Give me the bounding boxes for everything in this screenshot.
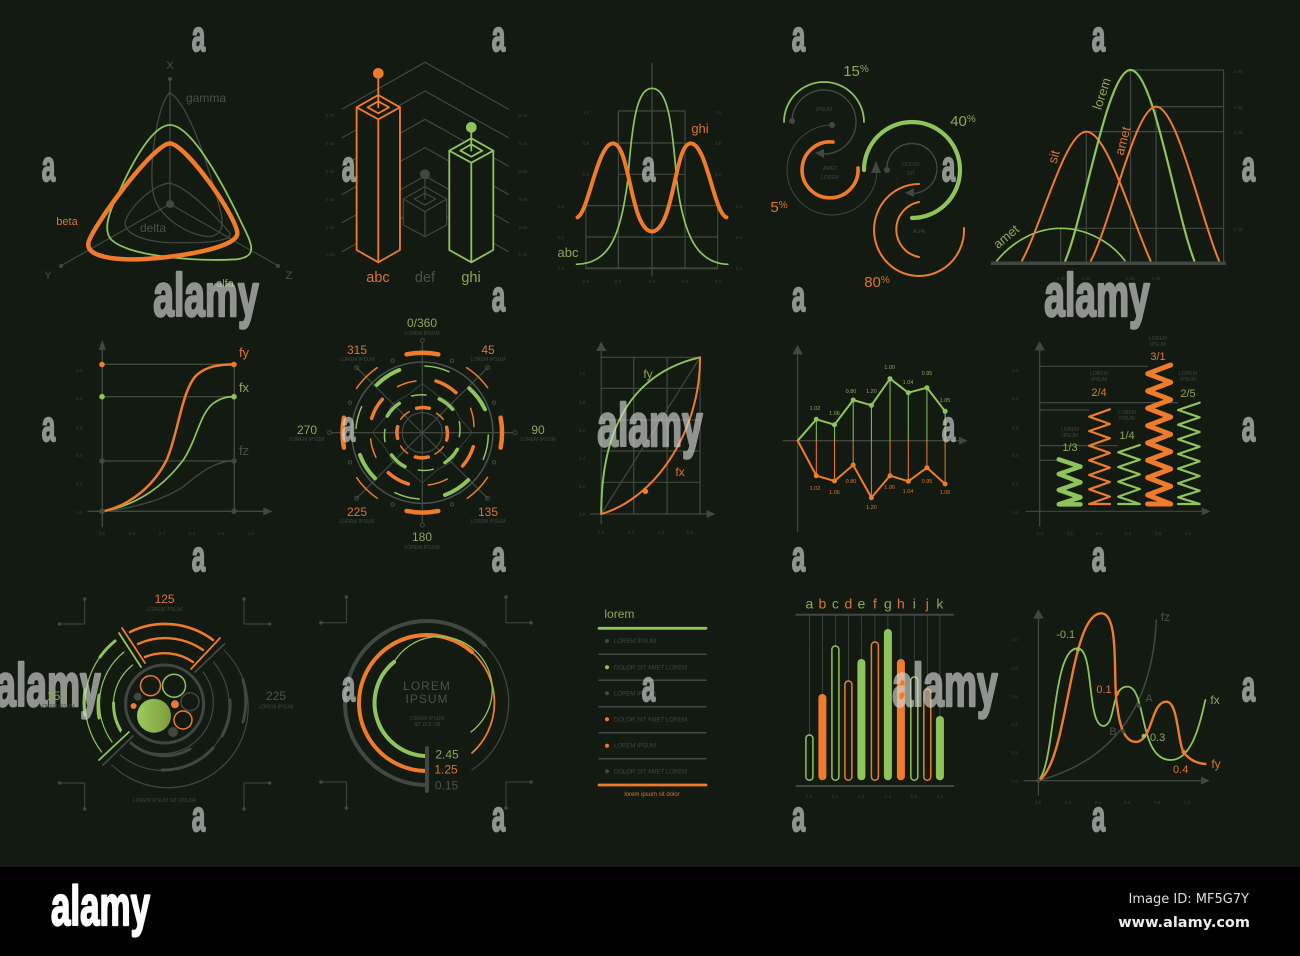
chart: overlapping peaks: 0.35 [1057,276,1066,281]
chart: oscillating curves: 1.0 [1011,637,1018,642]
watermark wordmarks: alamy [153,262,259,329]
chart: bell curves: 1.0 [583,110,590,115]
chart: concentric gauge: 2.45 [435,748,459,762]
chart: radar triangle [44,60,293,290]
chart: mirrored line plots: 1.20 [866,389,877,395]
chart: bell curves: 0.0 [736,266,743,271]
chart: polar dial: LOREM IPSUM [339,519,375,525]
chart: oscillating curves: fy [1211,757,1221,771]
chart: polar dial: 180 [412,530,432,544]
chart: zigzag spring bars: LOREM [1061,427,1079,433]
chart: overlapping peaks: sit [1045,148,1063,165]
chart: bell curves: 0.6 [715,172,722,177]
footer band: Image ID: MF5G7Y [1129,892,1249,907]
chart: circular sectors with bubbles: LOREM IPSUM [258,704,294,710]
panel: list: LOREM IPSUM [614,639,656,645]
panel: list: lorem [604,607,634,621]
chart: oscillating curves: 0.6 [1124,800,1131,805]
chart: overlapping peaks: 0.25 [1234,227,1243,232]
chart: zigzag spring bars: IPSUM [1150,342,1166,348]
watermark wordmarks: alamy [892,652,998,719]
chart: oscillating curves: 0.3 [1150,732,1165,744]
chart: circular sectors with bubbles: LOREM IPSUM [147,607,182,613]
chart: oscillating curves: 0.1 [1096,684,1112,696]
watermark glyphs: a [642,142,656,191]
chart: mirrored line plots: 1.05 [940,398,950,404]
chart: oscillating curves: 0.0 [1011,779,1018,784]
chart: isometric bars: 0.60 [326,169,335,174]
panel: list: LOREM IPSUM [614,744,656,750]
chart: isometric bars: 0.80 [326,197,335,202]
chart: zigzag spring bars: LOREM [1149,336,1167,342]
chart: leaf curves fy fx: 0.2 [628,530,635,535]
footer band: www.alamy.com [1118,915,1250,931]
chart: radar triangle: Z [286,270,293,282]
chart: isometric bars: def [415,270,436,286]
chart: polar dial: LOREM IPSUM [339,357,375,363]
chart: spiral percent arcs: LOREM [821,175,839,181]
chart: concentric gauge: LOREM [403,679,451,693]
chart: mirrored line plots: 0.80 [846,479,856,485]
chart: oscillating curves: 0.2 [1065,800,1072,805]
chart: overlapping peaks: 0.85 [1152,276,1161,281]
chart: zigzag spring bars: 0.4 [1096,531,1103,536]
chart: oscillating curves: 0.2 [1011,750,1018,755]
chart: mirrored line plots: 1.06 [829,411,840,417]
chart: mirrored line plots [783,345,968,532]
watermark glyphs: a [792,12,806,61]
chart: isometric bars: 0.20 [326,113,335,118]
watermark glyphs: a [342,402,356,451]
watermark glyphs: a [342,142,356,191]
chart: radar triangle: alfa [216,278,235,290]
chart: zigzag spring bars: LOREM [1179,371,1197,377]
chart: concentric gauge: SIT DOLOR [414,722,441,728]
chart: overlapping peaks: 0.85 [1234,105,1243,110]
footer band: alamy [51,874,150,937]
chart: radar triangle: beta [56,216,79,228]
chart: mirrored line plots: 1.02 [810,406,820,412]
chart: mirrored line plots: 1.02 [810,486,820,492]
chart: oscillating curves [1011,609,1221,805]
chart: bell curves: 0.8 [715,141,722,146]
chart: leaf curves fy fx: 1.0 [579,371,586,376]
label: 155 over watermark: 155 [47,689,67,703]
chart: leaf curves fy fx: 0.0 [598,530,605,535]
chart: isometric bars: 0.20 [519,113,528,118]
chart: zigzag spring bars: IPSUM [1062,433,1078,439]
chart: mirrored line plots: 1.04 [903,489,913,495]
chart: oscillating curves: fz [1161,610,1170,624]
chart: concentric gauge: 1.25 [434,762,458,776]
chart: cumulative curves fy fx fz: fx [239,380,250,395]
chart: zigzag spring bars: 0.0 [1012,510,1019,515]
chart: overlapping peaks: lorem [1090,76,1114,111]
watermark glyphs: a [942,142,956,191]
chart: isometric bars: 0.80 [519,197,528,202]
chart: spiral percent arcs: ALFA [913,229,926,235]
chart: spiral percent arcs: % [860,64,869,75]
chart: lettered bars: 0.4 [858,794,865,799]
chart: mirrored line plots: 1.04 [903,380,913,386]
chart: leaf curves fy fx [579,342,715,535]
chart: leaf curves fy fx: 0.8 [579,400,586,405]
watermark glyphs: a [42,402,56,451]
chart: bell curves: 0.6 [715,279,722,284]
chart: lettered bars: b [819,596,827,612]
chart: polar dial: 270 [297,423,317,437]
panel: list: LOREM IPSUM [614,691,656,697]
watermark glyphs: a [342,662,356,711]
chart: isometric bars: ghi [461,270,481,286]
chart: bell curves: 0.8 [583,141,590,146]
chart: overlapping peaks: 0.45 [1082,276,1091,281]
chart: mirrored line plots: 0.95 [922,479,932,485]
chart: lettered bars: 0.2 [832,794,839,799]
chart: leaf curves fy fx: 0.6 [579,428,586,433]
chart: zigzag spring bars: LOREM [1090,371,1108,377]
chart: polar dial: 45 [481,343,495,357]
watermark glyphs: a [792,792,806,841]
chart: lettered bars [796,596,953,799]
chart: lettered bars: c [832,596,839,612]
chart: spiral percent arcs: 15 [843,63,860,80]
chart: circular sectors with bubbles: 125 [155,592,175,606]
chart: bell curves [558,63,743,284]
chart: circular sectors with bubbles: LOREM IPSUM SIT DOLOR [133,798,197,804]
chart: cumulative curves fy fx fz: 0.6 [76,425,83,430]
chart: lettered bars: d [845,596,852,612]
chart: zigzag spring bars: 1.0 [1185,531,1192,536]
chart: cumulative curves fy fx fz: 0.4 [76,453,83,458]
chart: isometric bars: 0.40 [519,141,528,146]
chart: zigzag spring bars: 0.6 [1125,531,1132,536]
chart: overlapping peaks: amet [990,221,1022,252]
chart: lettered bars: k [936,596,944,612]
chart: zigzag spring bars [1012,336,1211,536]
chart: lettered bars: e [858,596,866,612]
chart: spiral percent arcs [770,63,976,291]
chart: bell curves: 0.6 [583,279,590,284]
watermark glyphs: a [192,12,206,61]
chart: lettered bars: 0.0 [806,794,813,799]
chart: radar triangle: Y [44,270,52,282]
chart: cumulative curves fy fx fz: 1.0 [76,368,83,373]
watermark glyphs: a [792,532,806,581]
chart: zigzag spring bars: 0.0 [1037,531,1044,536]
chart: isometric bars: 0.40 [326,141,335,146]
chart: lettered bars: 1.0 [937,794,944,799]
chart: polar dial: LOREM IPSUM [470,357,506,363]
chart: cumulative curves fy fx fz: 1.0 [248,531,255,536]
chart: bell curves: abc [558,245,579,260]
chart: cumulative curves fy fx fz: fz [239,443,249,458]
chart: zigzag spring bars: 2/4 [1091,387,1107,399]
chart: isometric bars: 0.60 [519,169,528,174]
chart: polar dial: LOREM IPSUM [289,437,325,443]
chart: polar dial: 0/360 [407,316,437,330]
chart: radar triangle: gamma [186,91,226,105]
chart: spiral percent arcs: AMET [823,166,837,172]
watermark glyphs: a [1242,662,1256,711]
chart: zigzag spring bars: 1/4 [1119,430,1135,442]
footer band [0,867,1300,956]
chart: zigzag spring bars: 0.8 [1155,531,1162,536]
chart: spiral percent arcs: IPSUM [816,107,832,113]
chart: spiral percent arcs: % [779,200,788,211]
chart: cumulative curves fy fx fz: fy [239,345,250,360]
watermark glyphs: a [492,532,506,581]
chart: concentric gauge: 0.15 [435,778,459,792]
chart: bell curves: 0.0 [649,279,656,284]
watermark glyphs: a [492,272,506,321]
chart: mirrored line plots: 1.00 [884,365,895,371]
panel: list: lorem ipsum sit dolor [624,792,680,798]
panel: list: DOLOR SIT AMET LOREM [614,665,687,671]
chart: overlapping peaks [990,69,1243,281]
chart: mirrored line plots: 0.95 [922,371,932,377]
chart: oscillating curves: fx [1210,693,1220,707]
chart: oscillating curves: A [1145,693,1153,705]
chart: cumulative curves fy fx fz: 0.2 [76,481,83,486]
chart: oscillating curves: 0.8 [1154,800,1161,805]
chart: zigzag spring bars: 0.2 [1067,531,1074,536]
chart: polar dial: 225 [347,505,367,519]
chart: concentric gauge [319,595,533,810]
chart: lettered bars: i [913,596,916,612]
chart: lettered bars: a [806,596,814,612]
chart: cumulative curves fy fx fz: 0.8 [76,396,83,401]
chart: polar dial: 135 [478,505,498,519]
chart: mirrored line plots: 1.06 [829,490,840,496]
chart: bell curves: 0.6 [583,172,590,177]
chart: circular sectors with bubbles: 225 [266,689,286,703]
panel: list: DOLOR SIT AMET LOREM [614,717,687,723]
chart: lettered bars: h [897,596,905,612]
chart: polar dial: LOREM IPSUM [404,545,440,551]
chart: zigzag spring bars: LOREM [1118,410,1136,416]
chart: oscillating curves: B [1109,726,1117,738]
watermark glyphs: a [42,142,56,191]
chart: bell curves: 0.4 [558,204,565,209]
watermark wordmarks [0,262,1150,719]
chart: leaf curves fy fx: 0.2 [579,484,586,489]
watermark glyphs: a [792,272,806,321]
chart: oscillating curves: 0.4 [1173,764,1188,776]
chart: lettered bars: 0.6 [885,794,892,799]
label: 155 over watermark: LOREM IPSUM [39,704,75,710]
chart: radar triangle: delta [140,221,166,235]
label: 155 over watermark [39,689,75,710]
watermark wordmarks: alamy [597,392,703,459]
chart: mirrored line plots: 1.05 [940,490,950,496]
chart: oscillating curves: 0.6 [1011,694,1018,699]
chart: lettered bars: 0.8 [911,794,918,799]
chart: oscillating curves: 0.4 [1011,722,1018,727]
chart: bell curves: 0.2 [558,235,565,240]
chart: isometric bars: 1.20 [326,252,335,257]
chart: spiral percent arcs: 80 [864,274,881,291]
chart: cumulative curves fy fx fz: 0.0 [76,510,83,515]
chart: leaf curves fy fx: 0.4 [658,530,665,535]
chart: leaf curves fy fx: 0.6 [687,530,694,535]
chart: cumulative curves fy fx fz: 0.4 [159,531,166,536]
chart: leaf curves fy fx: 0.4 [579,456,586,461]
chart: zigzag spring bars: IPSUM [1180,377,1196,383]
chart: cumulative curves fy fx fz: 0.8 [218,531,225,536]
chart: leaf curves fy fx: 0.0 [579,512,586,517]
chart: zigzag spring bars: 0.4 [1012,453,1019,458]
chart: oscillating curves: 0.0 [1035,800,1042,805]
chart: polar dial: LOREM IPSUM [520,437,556,443]
chart: isometric bars: 1.20 [519,252,528,257]
chart: zigzag spring bars: IPSUM [1119,416,1135,422]
chart: polar dial: LOREM IPSUM [470,519,506,525]
chart: bell curves: 0.2 [736,235,743,240]
chart: lettered bars: f [873,596,877,612]
chart: polar dial [289,316,556,551]
watermark wordmarks: alamy [0,652,101,719]
chart: bell curves: 0.4 [736,204,743,209]
chart: polar dial: 315 [347,343,367,357]
chart: circular sectors with bubbles [58,592,294,811]
chart: overlapping peaks: 0.65 [1126,276,1135,281]
watermark glyphs: a [1242,402,1256,451]
chart: cumulative curves fy fx fz [76,340,273,536]
watermark glyphs: a [192,792,206,841]
chart: zigzag spring bars: 0.8 [1012,396,1019,401]
chart: polar dial: 90 [531,423,545,437]
chart: lettered bars: g [884,596,892,612]
chart: concentric gauge: IPSUM [405,692,449,706]
watermark glyphs: a [192,532,206,581]
chart: oscillating curves: 1.0 [1184,800,1191,805]
chart: leaf curves fy fx: fy [643,367,653,381]
chart: bell curves: ghi [691,121,709,136]
chart: spiral percent arcs: DOLOR [902,162,920,168]
chart: leaf curves fy fx: fx [675,465,685,479]
chart: lettered bars: j [925,596,929,612]
chart: cumulative curves fy fx fz: 0.2 [129,531,136,536]
watermark glyphs: a [1092,532,1106,581]
chart: zigzag spring bars: 2/5 [1180,388,1196,400]
chart: spiral percent arcs: % [881,275,890,286]
watermark glyphs: a [492,792,506,841]
chart: bell curves: 0.3 [615,279,622,284]
chart: concentric gauge: LOREM IPSUM [409,716,445,722]
panel: list: DOLOR SIT AMET LOREM [614,769,687,775]
chart: spiral percent arcs: % [967,114,976,125]
chart: overlapping peaks: amet [1112,125,1134,157]
chart: isometric bars [326,62,528,286]
chart: zigzag spring bars: 1/3 [1062,442,1078,454]
watermark wordmarks: alamy [1044,262,1150,329]
chart: zigzag spring bars: 0.2 [1012,481,1019,486]
watermark glyphs: a [492,12,506,61]
chart: polar dial: LOREM IPSUM [404,331,440,337]
chart: zigzag spring bars: 0.6 [1012,425,1019,430]
chart: isometric bars: abc [366,270,390,286]
chart: mirrored line plots: 0.80 [846,389,856,395]
chart: radar triangle: X [166,60,174,72]
chart: oscillating curves: -0.1 [1056,629,1075,641]
chart: zigzag spring bars: IPSUM [1091,377,1107,383]
chart: overlapping peaks: 0.95 [1234,69,1243,74]
watermark glyphs: a [1092,12,1106,61]
chart: bell curves: 1.0 [715,110,722,115]
chart: overlapping peaks: 0.55 [1234,130,1243,135]
chart: spiral percent arcs: SIT [907,171,915,177]
watermark glyphs: a [642,662,656,711]
chart: bell curves: 0.3 [682,279,689,284]
watermark glyphs: a [1242,142,1256,191]
chart: mirrored line plots: 1.20 [866,505,877,511]
chart: mirrored line plots: 1.00 [884,485,895,491]
watermark glyphs: a [942,402,956,451]
chart: spiral percent arcs: 40 [950,113,967,130]
chart: bell curves: 0.0 [558,266,565,271]
chart: isometric bars: 1.00 [326,225,335,230]
panel: list [599,607,706,798]
chart: isometric bars: 1.00 [519,225,528,230]
chart: oscillating curves: 0.4 [1095,800,1102,805]
chart: cumulative curves fy fx fz: 0.0 [99,531,106,536]
chart: cumulative curves fy fx fz: 0.6 [189,531,196,536]
watermark glyphs: a [1092,792,1106,841]
chart: oscillating curves: 0.8 [1011,666,1018,671]
chart: zigzag spring bars: 1.0 [1012,368,1019,373]
chart: zigzag spring bars: 3/1 [1150,351,1166,363]
chart: spiral percent arcs: 5 [770,199,779,216]
